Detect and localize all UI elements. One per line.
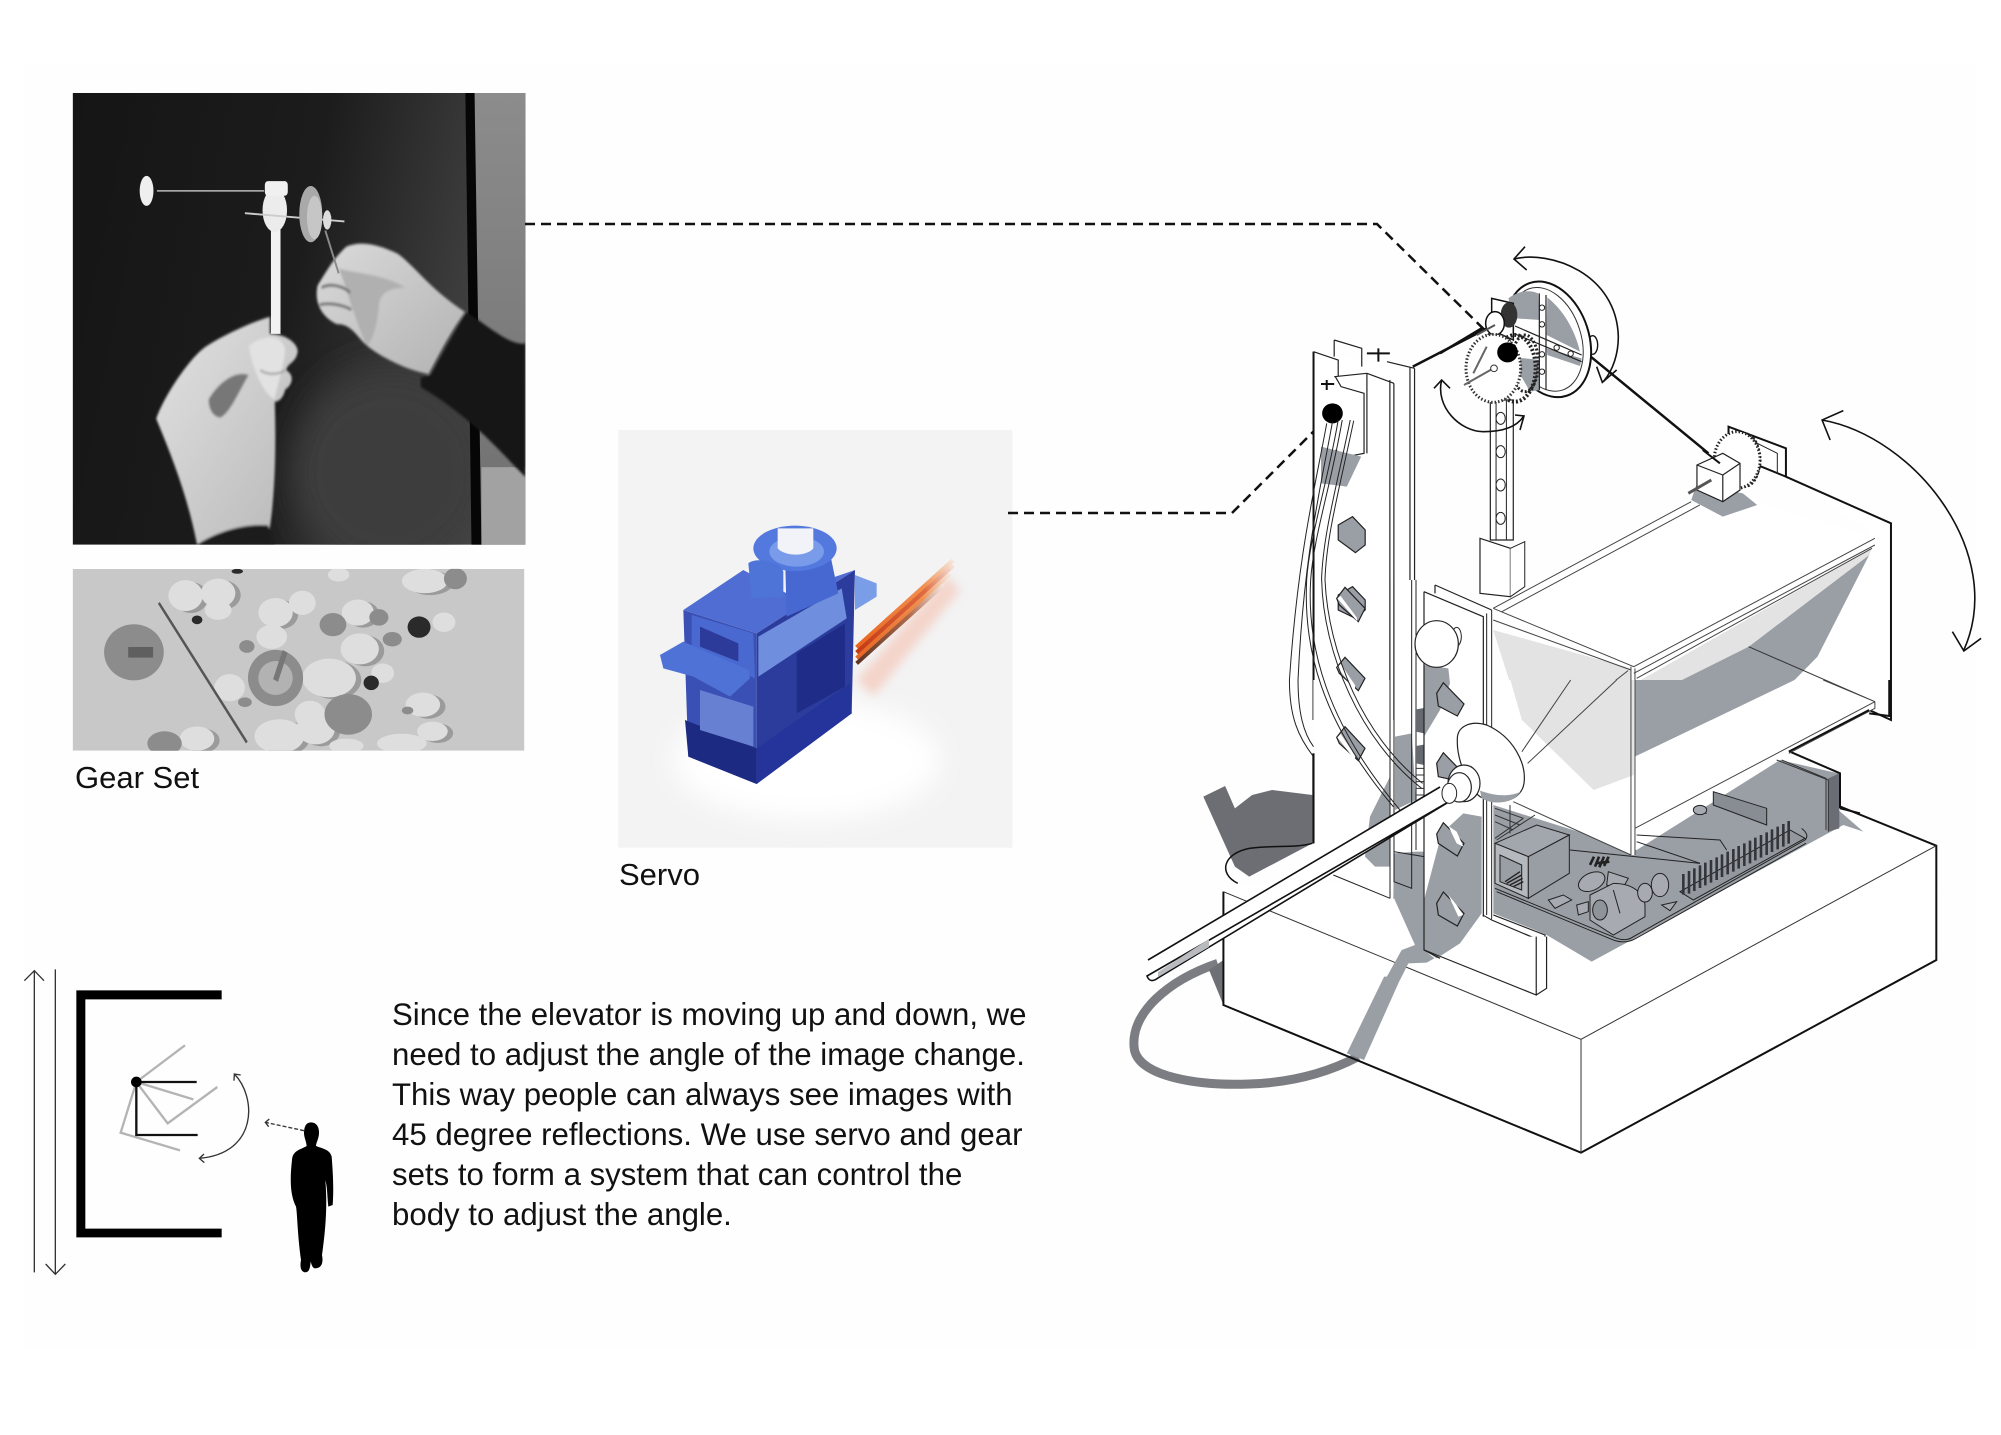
photo: hands holding gear mechanism [73,93,525,579]
explanatory text block: sets to form a system that can control the [392,1157,962,1192]
black mirror position [136,1082,198,1135]
explanatory text block [392,997,1027,1232]
circuit board area [1493,752,1863,962]
explanatory text block: This way people can always see images with [392,1077,1013,1112]
up arrow [24,971,44,1272]
curved double arrow [199,1074,249,1163]
handle disc and collar [1442,723,1524,803]
explanatory text block: body to adjust the angle. [392,1197,732,1232]
elevator bracket [76,990,222,1237]
hex bolts on column [1338,517,1365,618]
grey mirror positions [121,1045,217,1150]
explanatory text block: Since the elevator is moving up and down, we [392,997,1027,1032]
label: gear set: Gear Set [75,760,199,795]
cables [1289,420,1354,680]
rotation arrow: upper wheel [1514,247,1618,382]
base box and shadows [1134,753,1936,1153]
gear wheel assembly [1440,270,1605,408]
person silhouette [291,1122,333,1272]
rotation arrow: box tilt [1822,411,1981,651]
tilting box body [1493,477,1891,720]
bottom front plate [1492,915,1545,980]
elevator angle diagram [24,969,333,1274]
black pivot markers [1322,342,1518,423]
rotation arrow: small gear [1434,380,1524,432]
sight line arrow [265,1119,304,1131]
handle rod [1147,787,1457,981]
servo wires [857,560,953,663]
servo body [660,526,877,784]
down arrow [46,969,65,1274]
dashed leader: servo to motor [1008,417,1328,513]
label: servo: Servo [619,857,700,892]
dashed leader: gear set to mechanism [525,224,1507,352]
isometric mechanism diagram [1134,247,1981,1153]
panel: servo photo [618,430,1012,848]
column, strut and servo [1314,327,1786,720]
explanatory text block: need to adjust the angle of the image change. [392,1037,1025,1072]
photo: gear set parts [73,568,524,756]
middle plates and bolts [1306,580,1492,980]
explanatory text block: 45 degree reflections. We use servo and gear [392,1117,1022,1152]
pivot dot [131,1077,142,1087]
